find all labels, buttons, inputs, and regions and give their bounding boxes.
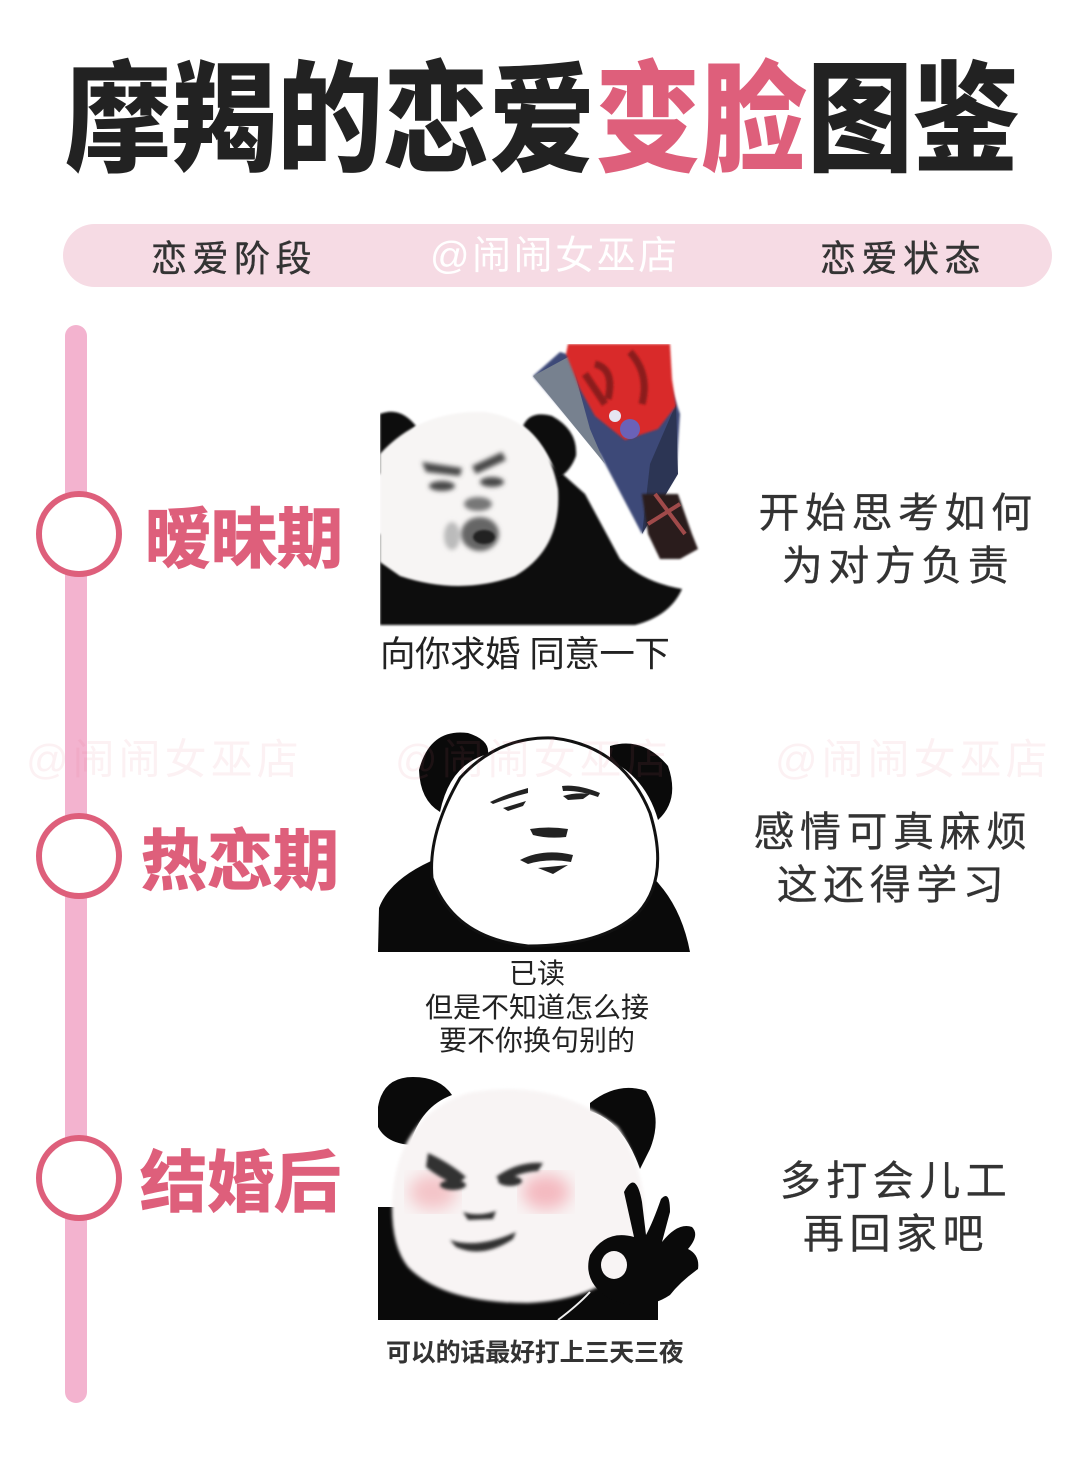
status text 3: 再回家吧 (803, 1211, 989, 1257)
header bar (63, 224, 1052, 287)
header: stage column: 恋爱阶段 (151, 238, 317, 279)
timeline marker 3 (36, 1135, 122, 1221)
timeline bar (65, 325, 87, 1403)
meme 2 caption: 但是不知道怎么接 (425, 992, 649, 1022)
meme 3: panda OK gesture (378, 1077, 698, 1367)
meme 2 caption: 已读 (509, 958, 565, 989)
meme 2 caption: 要不你换句别的 (439, 1025, 635, 1056)
timeline marker 2 (36, 813, 122, 899)
status text 2 (754, 809, 1032, 908)
status text 3: 多打会儿工 (780, 1158, 1012, 1204)
meme 2: panda read message (378, 732, 690, 1056)
stage label: 暧昧期: 暧昧期 (145, 502, 343, 576)
watermark left: @闹闹女巫店 (26, 736, 303, 783)
header: status column: 恋爱状态 (820, 238, 986, 279)
stage label: 热恋期: 热恋期 (141, 824, 339, 898)
status text 3 (780, 1158, 1012, 1257)
status text 1: 开始思考如何 (758, 490, 1038, 536)
watermark middle: @闹闹女巫店 (395, 736, 672, 783)
watermark row (26, 736, 1052, 783)
status text 1: 为对方负责 (782, 543, 1014, 589)
status text 1 (758, 490, 1038, 589)
meme 1 caption: 向你求婚 同意一下 (380, 634, 669, 674)
watermark in header: @闹闹女巫店 (430, 235, 680, 278)
meme 3 caption: 可以的话最好打上三天三夜 (386, 1339, 684, 1367)
timeline marker 1 (36, 491, 122, 577)
meme 2 caption (425, 958, 649, 1056)
title: 摩羯的恋爱变脸图鉴 (65, 54, 1019, 188)
meme 1: panda with bouquet (380, 344, 700, 674)
meme 2 illustration (378, 732, 690, 952)
meme 3 illustration (378, 1077, 698, 1320)
watermark right: @闹闹女巫店 (775, 736, 1052, 783)
meme 1 illustration (380, 344, 700, 627)
status text 2: 感情可真麻烦 (754, 809, 1032, 855)
stage label: 结婚后: 结婚后 (140, 1146, 341, 1221)
status text 2: 这还得学习 (777, 862, 1009, 908)
